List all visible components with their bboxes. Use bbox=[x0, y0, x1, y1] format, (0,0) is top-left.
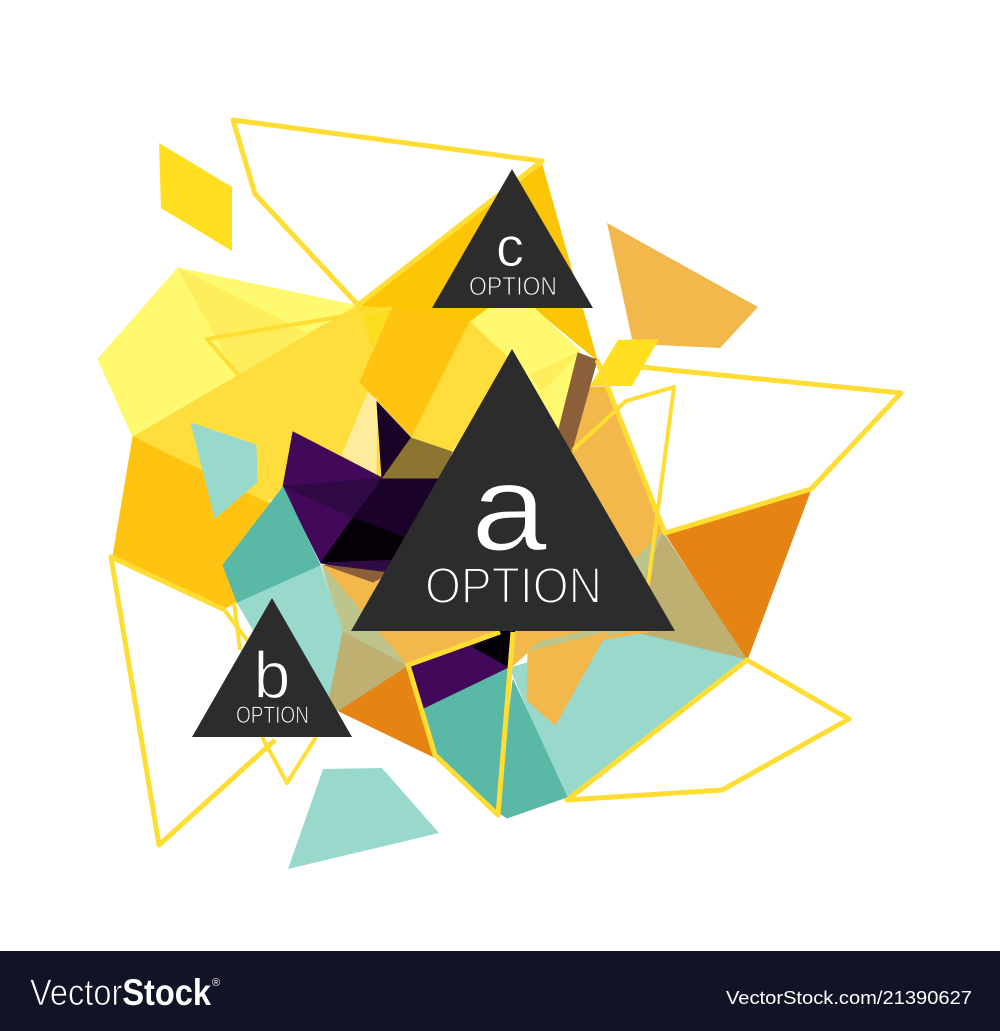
floating shards bbox=[159, 143, 758, 869]
triangle callout: option a: a bbox=[471, 440, 547, 576]
polygon cluster: dark purple centre bbox=[283, 402, 452, 575]
triangle callout: option b bbox=[192, 598, 352, 737]
triangle callout: option a bbox=[351, 349, 675, 631]
yellow wireframe outlines bbox=[111, 120, 901, 845]
polygon cluster: lower left mint and tan shards bbox=[191, 423, 510, 758]
footer logo: VectorStock bbox=[30, 972, 211, 1013]
triangle callout: option c: c bbox=[496, 215, 524, 278]
triangle callout: option b: b bbox=[254, 638, 290, 712]
triangle callout: option c: OPTION bbox=[469, 271, 557, 301]
footer registered mark: ® bbox=[212, 977, 220, 989]
footer bar bbox=[0, 951, 1000, 1031]
polygon cluster: right tan and orange shards bbox=[510, 353, 810, 800]
polygon cluster: lower centre teal and purple bbox=[408, 628, 567, 818]
triangle callout: option a: OPTION bbox=[425, 557, 602, 614]
footer image id: VectorStock.com/21390627 bbox=[726, 987, 972, 1008]
polygon cluster: yellow left shards bbox=[98, 165, 597, 608]
triangle callout: option b: OPTION bbox=[236, 702, 309, 729]
triangle callout: option c bbox=[432, 169, 593, 308]
